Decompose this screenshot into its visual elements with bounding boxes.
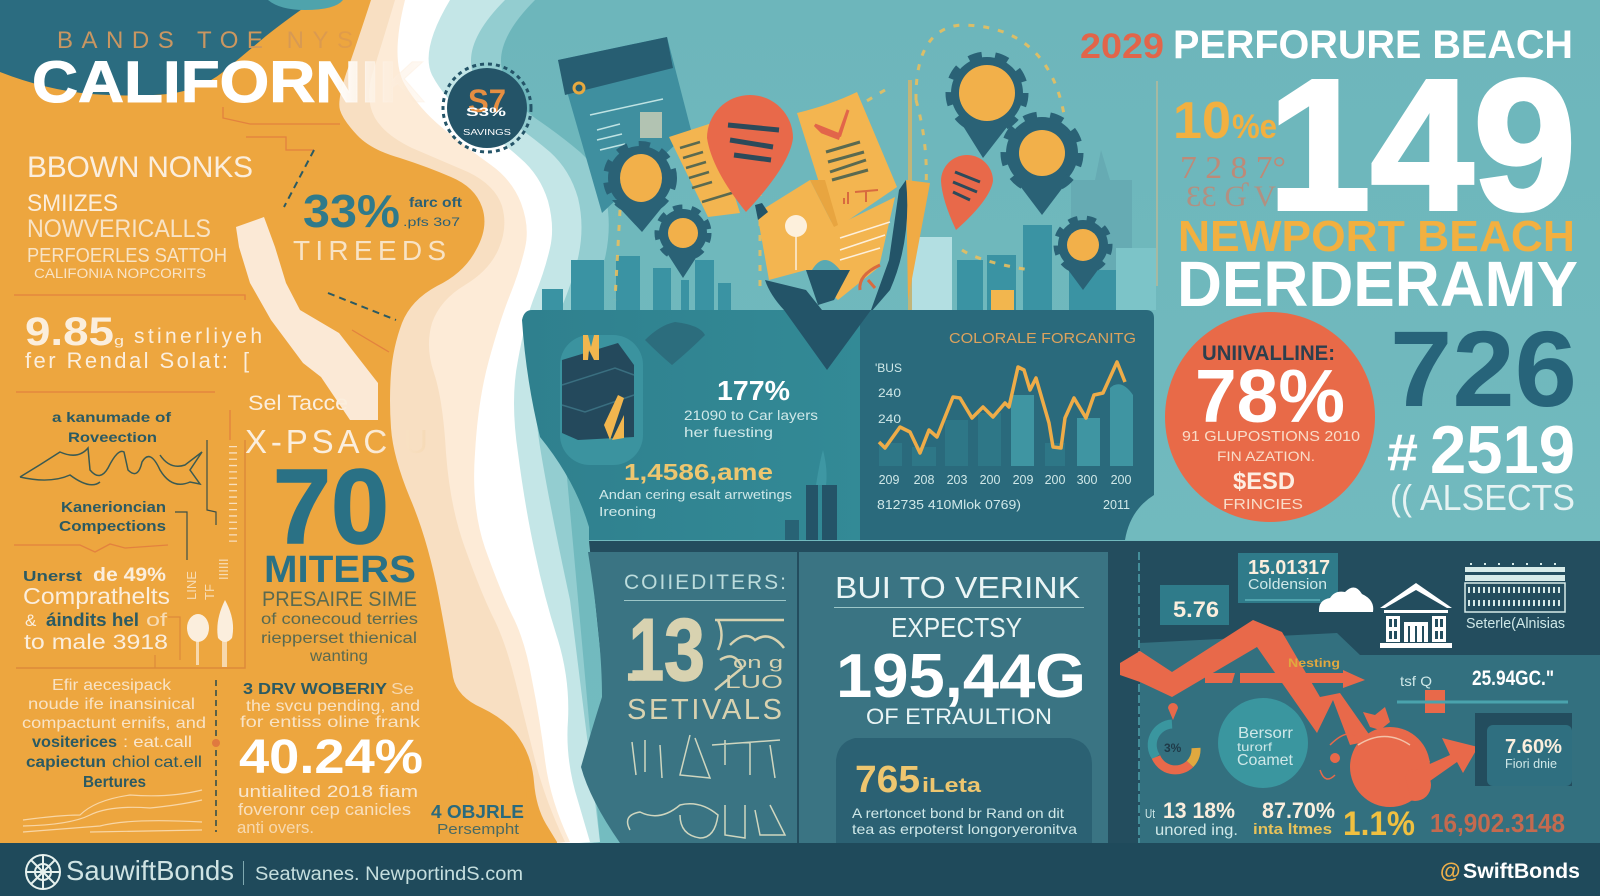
text block: Efir aecesipack: : eat.call [123,734,192,751]
bottom stats row: 13 18% [1163,798,1235,823]
expectancy content [834,570,1086,729]
icon: trees [187,600,233,667]
stat: 9.85: fer Rendal Solat: [25,348,228,373]
callout: 765 leta: iLeta [922,775,982,797]
stat: 33 percent: 33% [303,185,400,237]
stat: 40.24 percent: foveronr cep canicles [238,801,411,819]
stat: 177 percent [684,375,818,440]
bottom stats row: 1.1% [1343,805,1415,843]
icon: frieze building [1465,564,1565,612]
footer social handle: SwiftBonds [1463,860,1580,883]
callout: 765 leta: tea as erpoterst longoryeronitva [852,821,1077,837]
big number 149: 149 [1268,42,1576,249]
left text block: brown bonks [27,151,253,281]
stat: 49 percent: to male 3918 [24,631,168,654]
title: 2029: 2029 [1080,27,1164,66]
stat: 2519: 2519 [1430,412,1575,488]
badge: S3% [466,105,507,119]
stat: 177 percent: 21090 to Car layers [684,408,818,423]
vertical labels: IIIIII [216,558,231,580]
red zigzag arrow [1120,620,1373,745]
panel: forecast chart background [860,310,1154,540]
footer social handle: @ [1440,860,1460,883]
right divider [1156,81,1158,286]
text block: Efir aecesipack: capiectun [26,754,106,771]
label: tsf Q: tsf Q [1400,673,1432,689]
stat: 9.85 [25,310,262,373]
stat: 33 percent: TIREEDS [293,235,446,266]
icon: gear pin 1 [607,145,673,232]
map blob [645,322,705,365]
panel: expectancy [799,552,1108,843]
stat: 33 percent: .pfs 3o7 [403,215,460,229]
funnel tip [784,310,871,370]
ruler and connector lines [16,440,245,668]
festivals content: on g [733,653,783,672]
card: 15.01317 [1238,553,1338,603]
wave lines [23,790,202,832]
label: X-PSACU: X-PSAC U [245,423,428,460]
label: Nesting: Nesting [1288,656,1340,670]
bottom stats row: unored ing. [1155,822,1238,839]
panel: right chart lower [1140,633,1600,843]
text block: Efir aecesipack [22,677,206,791]
stat: 49 percent: áindits hel [46,610,139,630]
card: 7.60 percent: Fiori dnie [1505,756,1557,771]
icon: gear pin 4 [1005,116,1079,215]
stat: 1,4586: 1,4586,ame [624,459,773,485]
funnel hand silhouette [755,180,907,370]
festivals content: LUO [725,672,783,692]
card: 15.01317: 15.01317 [1248,557,1330,579]
text block: Efir aecesipack: compactunt ernifs, and [22,715,206,732]
stat: 40.24 percent: the svcu pending, and [246,698,420,715]
bar and line chart: 240 [878,386,901,400]
caption: kanumade: a kanumade of [52,409,171,425]
main title: CALIFORNIK [32,50,425,115]
bar and line chart: 240 [878,412,901,426]
stat: 49 percent: of [146,610,168,630]
heading: newport beach: NEWPORT BEACH [1178,212,1575,261]
donut chart: 3% [1164,741,1182,755]
left text block: brown bonks: BBOWN NONKS [27,151,253,184]
callout: 765 leta: A rertoncet bond br Rand on dit [852,805,1064,821]
stat: 70 miters: 70 [273,448,389,566]
callout circle: 78 percent: $ESD [1233,468,1295,495]
red location pin 1 [707,95,793,212]
text block: Efir aecesipack: cat.ell [154,754,202,771]
label: Seterle: Seterle(Alnisias [1466,615,1565,632]
stat: 2519 [1387,412,1575,518]
icon: stacked box [560,335,643,465]
stat: 70 miters: of conecoud terries [261,611,418,628]
bar and line chart: 209 [879,473,899,487]
axis line [1138,552,1140,843]
bottom stats row [1145,798,1565,843]
bar and line chart: 200 [1045,473,1065,487]
stat: 49 percent: de 49% [93,565,166,586]
stat: 9.85: [ [243,348,249,373]
panel: bottom row strip [589,541,1600,843]
icon: gear pin 2 [658,208,708,278]
card: 5.76 [1160,585,1229,625]
festivals content [624,571,786,838]
left text block: brown bonks: SMIIZES [27,190,118,217]
stat: 70 miters [261,448,418,665]
left text block: brown bonks: CALIFONIA NOPCORITS [34,265,206,281]
teal circle callout: Bersorr [1238,725,1294,742]
bottom stats row: 16,902.3148 [1430,808,1565,838]
stat: 177 percent: her fuesting [684,425,773,440]
stat: 49 percent [23,565,170,654]
scribble numerals: 7 2 8 7° [1180,149,1286,185]
stat: 10 percent: 10 [1173,92,1231,150]
stat: 177 percent: 177% [717,375,790,406]
text block: Efir aecesipack: vositerices [32,734,117,751]
bar and line chart: 2011 [1103,498,1130,512]
bar and line chart: 300 [1077,473,1097,487]
label: OBJRLE: 4 OBJRLE [431,802,524,822]
stat: 40.24 percent: untialited 2018 fiam [238,783,418,801]
callout circle: 78 percent: 91 GLUPOSTIONS 2010 [1182,428,1360,445]
text block: Efir aecesipack: noude ife inansinical [28,696,195,713]
scribble numerals [1180,149,1286,213]
stat: 726: 726 [1390,308,1577,429]
text block: Efir aecesipack: Efir aecesipack [52,677,172,694]
caption: Kanerioncian: Kanerioncian [61,499,166,516]
label: OBJRLE [431,802,524,838]
stat: 2519: (( [1390,477,1412,518]
caption: Kanerioncian: Compections [59,518,166,535]
stat: 40.24 percent: 40.24% [239,731,423,784]
festivals content: SETIVALS [627,694,782,726]
vertical labels: TF [202,584,217,600]
stat: 49 percent: & [25,611,37,630]
left text block: brown bonks: NOWVERICALLS [27,215,211,243]
bar and line chart: 208 [914,473,934,487]
stat: 49 percent: Comprathelts [23,583,170,609]
badge: SAVINGS [463,128,511,137]
icon: smokestacks [785,450,837,540]
callout circle: 78 percent: FIN AZATION. [1217,448,1315,464]
icon: whale outline [20,448,202,485]
bar and line chart: 812735 410Mlok 0769) [877,498,1021,512]
bar and line chart: 'BUS [875,361,902,375]
map dashed connectors [284,150,396,320]
stat: 10 percent [1173,92,1277,150]
stat: 1,4586: Ireoning [599,505,656,519]
icon: columned building [1380,583,1452,648]
stat: 1,4586 [599,459,792,519]
stat: 33 percent [293,185,462,266]
illustration: skyline [542,80,1156,310]
dark teal header blob [0,0,343,96]
bar and line chart: 200 [980,473,1000,487]
dashed divider [212,680,220,832]
document card [558,37,691,213]
expectancy content: 195,44G [836,642,1086,711]
bar and line chart: 200 [1111,473,1131,487]
coastline bands [0,0,609,896]
vertical labels [184,558,231,600]
text block: Efir aecesipack: Bertures [83,774,146,791]
left text block: brown bonks: PERFOERLES SATTOH [27,245,227,267]
callout circle: 78 percent: UNIIVALLINE: [1202,342,1335,365]
caption: kanumade: Roveection [68,429,157,445]
stat: 40.24 percent: for entiss oline frank [240,714,421,731]
stat: 9.85: g [114,333,124,348]
stat: 40.24 percent [237,681,423,837]
expectancy content: EXPECTSY [891,612,1022,643]
vertical labels: LINE [184,571,199,600]
teal circle callout: turorf [1237,740,1273,754]
stat: 2519: ALSECTS [1420,477,1575,518]
stat: 70 miters: MITERS [264,549,416,591]
panel: middle left [522,310,870,540]
card: 15.01317: Coldension [1248,576,1327,593]
caption: Kanerioncian [59,499,166,535]
icon: gear pin 5 [1057,219,1109,290]
stat: 25.94GC: 25.94GC." [1472,667,1554,690]
card: 5.76: 5.76 [1173,597,1219,622]
icon: cloud [1319,587,1373,612]
callout circle: 78 percent: FRINCIES [1223,496,1303,513]
bottom stats row: inta ltmes [1253,821,1332,838]
thin red map lines [14,107,389,552]
callout circle: 78 percent: 78% [1195,354,1345,438]
red ball and up arrow [1320,690,1478,807]
label: Sel Tacce: Sel Tacce [248,392,348,415]
bar and line chart: COLORALE FORCANITG [949,330,1136,347]
stat: 33 percent: farc oft [409,194,462,210]
footer website: Seatwanes. NewportindS.com [255,864,523,885]
bar and line chart [875,330,1136,512]
sand speckles [506,741,534,799]
festivals content: . [626,645,637,689]
stat: 70 miters: PRESAIRE SIME [262,588,417,611]
stat: 9.85: 9.85 [25,310,114,354]
label: OBJRLE: Persempht [437,821,520,838]
dashed flight paths [615,25,1065,300]
footer bar [0,843,1600,896]
callout: 765 leta: 765 [855,759,920,801]
scribble numerals: ƐƐ Ɠ V [1186,180,1276,213]
card: 7.60 percent: 7.60% [1505,736,1562,758]
teal circle callout: Coamet [1237,752,1294,769]
stat: 9.85: stinerliyeh [134,325,262,348]
footer logo icon [26,855,60,889]
stat: 70 miters: wanting [309,648,368,665]
footer brand name: SauwiftBonds [66,855,234,886]
card: 7.60 percent [1475,713,1572,786]
expectancy content: OF ETRAULTION [866,704,1052,729]
paper: right sheet [797,92,897,230]
open book illustration [757,180,930,300]
title: performance beach: PERFORURE BEACH [1173,23,1573,67]
icon: gear pin 3 [950,56,1024,158]
bottom stats row: Ut [1145,806,1155,821]
callout circle: 78 percent [1165,312,1375,522]
badge [443,64,531,152]
festivals content: 3 [664,600,705,699]
eyebrow heading: BANDS TOE NYS [57,27,353,54]
stat: 1,4586: Andan cering esalt arrwetings [599,488,792,502]
panel: festivals [581,552,797,843]
stat: 40.24 percent: 3 DRV WOBERIY [243,681,387,698]
donut chart [1152,703,1196,770]
text block: Efir aecesipack: chiol [112,754,150,771]
festivals content: COIIEDITERS: [624,571,786,594]
heading: derderamy: DERDERAMY [1177,248,1578,320]
caption: kanumade [52,409,171,445]
stat: 40.24 percent: Se [391,681,414,698]
expectancy content: BUI TO VERINK [835,570,1080,605]
thin progress arrow [1397,700,1568,704]
bar and line chart: 203 [947,473,967,487]
badge: S7 [468,83,506,119]
orange land panel [0,0,557,896]
stat: 10 percent: %e [1232,108,1277,146]
stat: 2519: # [1387,424,1418,482]
stat: 40.24 percent: anti overs. [237,819,314,837]
stat: 49 percent: Unerst [23,568,82,585]
callout: 765 leta [836,738,1092,843]
paper: left sheet [669,123,740,217]
festivals content: 1 [629,600,664,699]
bar and line chart: 209 [1013,473,1033,487]
teal circle callout [1218,698,1308,788]
California map [236,217,378,420]
bottom stats row: 87.70% [1262,798,1335,823]
red location pin 2 [941,155,993,230]
stat: 70 miters: riepperset thienical [261,630,417,647]
